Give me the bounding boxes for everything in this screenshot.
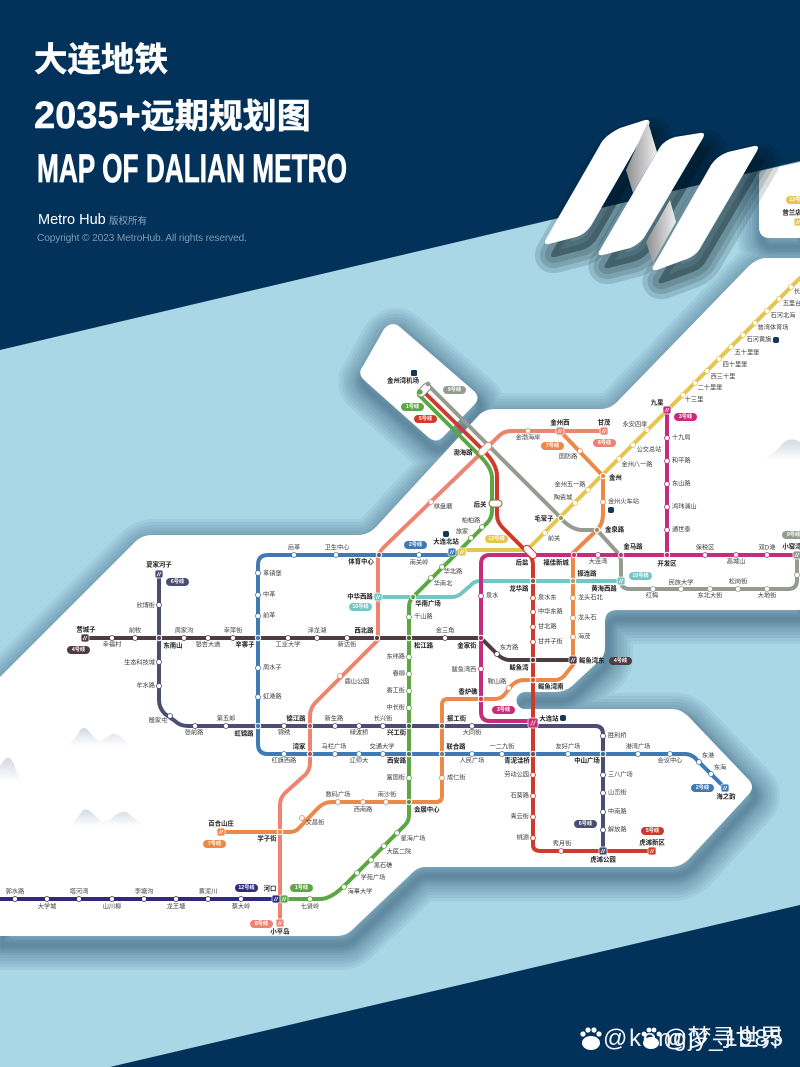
station labels south: 郭水路 [6,888,25,896]
line badges: 8号线 [255,919,269,927]
station labels south: 鲅鱼湾东 [579,656,605,664]
station labels south: 河口 [264,884,276,892]
station labels west: 周家沟 [175,626,193,634]
station labels north: 华南北 [434,580,453,588]
station labels north: 大连湾 [589,558,607,566]
line 2 [258,555,725,788]
station labels north: 渤海路 [453,448,473,456]
station labels north: 十九局 [672,434,691,442]
title block [34,42,347,244]
paw icon 1 [580,1027,602,1050]
station labels west: 周水子 [263,664,282,672]
line 10 [378,581,621,597]
station labels north: 旅家 [456,528,468,536]
station labels south: 学苑广场 [361,874,385,882]
stations line 13 [542,284,794,536]
line badges: 5号线 [419,414,433,422]
station labels south: 虎滩公园 [590,854,616,864]
station labels west: 张前路 [185,728,204,736]
station labels north: 东山路 [672,480,691,488]
line badges: 12号线 [238,883,255,891]
station labels west: 前革 [263,612,275,620]
station labels west: 幸萍街 [224,626,242,634]
line 13 [462,278,800,550]
line 12 [0,897,276,901]
copyright: Copyright © 2023 MetroHub. All rights reserved. [37,233,247,244]
station labels west: 欣博街 [136,602,155,610]
station labels west: 马栏广场 [322,742,346,750]
station labels west: 银杏大道 [196,640,220,648]
station labels north: 后盐 [516,558,529,566]
station labels north: 金州 [609,472,622,482]
station labels south: 会展中心 [414,804,440,814]
station labels west: 卫生中心 [325,544,349,552]
decorative mountains [0,439,800,826]
station labels south: 龙王塘 [167,902,185,910]
station labels south: 金三角 [436,626,454,634]
station labels north: 东北大街 [698,592,722,600]
station labels west: 泽龙湖 [308,626,326,634]
logo fold 2 [646,200,676,263]
station labels south: 东海 [714,764,726,772]
station labels north: 大地街 [758,592,776,600]
station labels west: 红旗西路 [272,756,297,764]
station labels south: 东港 [702,752,715,760]
station labels north: 金州火车站 [608,498,639,506]
logo ribbon 3 [653,146,758,270]
line badges: 9号线 [787,530,800,538]
line badges: 4号线 [614,656,628,664]
station labels south: 香炉礁 [458,686,478,696]
station labels north: 西三十里 [711,372,735,380]
logo fold 1 [626,122,657,193]
station labels north: 金州湾机场 [387,376,420,384]
station labels south: 会议中心 [658,756,682,764]
station labels south: 鲅鱼湾西 [452,666,476,674]
line badges: 5号线 [646,826,660,834]
station labels north: 前关 [548,534,560,542]
line badges: 6号线 [579,819,593,827]
line 3 [481,410,797,721]
station labels north: 开发区 [657,558,677,568]
station labels west: 湾家 [293,742,306,750]
station labels west: 中华西路 [347,592,373,600]
station labels north: 毛莹子 [534,514,554,522]
station labels north: 鸿玮澜山 [672,502,697,510]
station labels south: 秀月街 [553,840,571,848]
station labels south: 海事大学 [348,888,372,896]
station labels west: 牟水路 [136,682,156,690]
line badges: 8号线 [598,438,612,446]
line badges: 7号线 [546,441,560,449]
stations line 4 [110,636,500,656]
station labels north: 后关 [474,500,487,508]
station labels south: 山川柳 [103,902,121,910]
station labels south: 友好广场 [556,742,580,750]
station labels west: 生态科技城 [124,658,155,666]
station labels west: 中革 [263,590,275,598]
station labels south: 人民广场 [460,756,484,764]
station labels north: 四十里堡 [723,360,747,368]
station labels north: 南关岭 [410,558,428,566]
logo ribbon 2 [599,133,704,255]
station labels west: 东南山 [163,640,183,650]
station labels north: 石河北海 [771,312,795,320]
station labels south: 金家街 [457,640,477,650]
watermark [580,1025,783,1052]
watermark text 1: @kongjy_1985 [603,1025,783,1052]
station labels north: 振连路 [577,568,597,578]
station labels west: 虹锦路 [234,728,254,738]
station labels north: 金渤海岸 [516,434,540,442]
route lines [0,278,800,923]
line 6 [159,574,603,851]
station labels south: 中南路 [608,808,627,816]
station labels south: 解放路 [608,826,627,834]
station labels west: 体育中心 [348,556,374,566]
station labels north: 永安四季 [623,420,647,428]
station labels north: 华北路 [444,568,463,576]
line badges: 2号线 [409,540,423,548]
station labels north: 和平路 [672,456,691,464]
station labels west: 新达街 [338,640,356,648]
station labels south: 成仁街 [447,774,466,782]
station labels north: 金泉路 [605,524,625,534]
station labels north: 龙头石 [578,614,597,622]
station labels north: 二十里堡 [698,384,722,392]
line badges: 10号线 [632,571,649,579]
line badges: 6号线 [171,577,185,585]
station labels west: 锦江路 [286,714,306,722]
line badges [67,195,800,928]
stations line 9 [650,572,800,592]
station labels south: 虎滩新区 [639,838,665,846]
line badges: 7号线 [208,839,222,847]
paw icon 2 [642,1028,661,1049]
station labels west: 西北路 [354,626,374,634]
station labels north: 棋盘磨 [434,502,452,510]
station labels north: 金马路 [623,542,643,550]
station labels north: 甘井子街 [538,638,563,646]
station labels south: 蔡大岭 [232,902,250,910]
station labels west: 新生路 [325,714,344,722]
stations line 1 [308,524,484,902]
station labels north: 中华东路 [538,608,564,616]
station labels west [76,544,407,814]
station labels north: 普湾体育场 [758,324,788,332]
station labels west: 革镇堡 [263,570,282,578]
station labels west: 鹿山公园 [345,678,369,686]
station labels west: 交通大学 [370,742,394,750]
station labels north: 高城山 [727,558,745,566]
station labels south: 桃源 [517,834,529,842]
station labels north: 十三里 [685,396,703,404]
line badges: 3号线 [679,412,693,420]
watermark text 2: @梦寻世界 [663,1025,783,1052]
station labels south: 一二九街 [490,742,514,750]
line 8 [280,431,603,923]
station labels south: 青泥洼桥 [504,756,530,764]
station labels west: 西南路 [354,806,373,814]
station labels north: 大连北站 [433,536,459,546]
terminal stations [81,218,800,927]
station labels south: 鲅鱼湾南 [538,682,564,690]
land masses [0,162,800,936]
station labels north: 金州西 [550,418,570,426]
station labels north: 民族大学 [669,578,693,586]
station labels west: 辽师大 [350,756,368,764]
station labels west: 数码广场 [326,790,350,798]
station labels west: 南沙街 [378,790,396,798]
station labels south: 胜利桥 [608,732,627,740]
station labels north: 陶瓷城 [554,494,572,502]
station labels south: 文昌街 [306,818,324,826]
station labels north: 甘茂 [598,418,611,426]
station labels north [387,208,800,646]
station labels north: 龙华路 [509,584,529,592]
station labels west: 锦绣 [278,728,291,736]
station labels south: 大学城 [38,902,56,910]
line badges: 10号线 [352,602,369,610]
station labels north: 华南广场 [415,598,441,608]
station labels north: 国防路 [559,452,578,460]
station labels south: 大同街 [463,728,481,736]
station labels south: 七贤岭 [301,902,319,910]
facility icons [411,337,779,721]
station labels west: 辛寨子 [235,640,255,648]
station labels south: 大连站 [539,714,559,722]
station labels north: 千山路 [414,612,433,620]
station labels west: 后革 [288,544,300,552]
station labels south: 大医二院 [387,848,411,856]
station labels west: 西安路 [387,756,407,764]
station labels north: 金州八一路 [622,460,653,468]
logo ribbon 1 [545,120,650,244]
line 1 [284,395,492,899]
line badges: 3号线 [497,705,511,713]
station labels north: 松岗街 [729,578,747,586]
station labels south: 星海广场 [401,834,425,842]
station labels south: 东方路 [500,644,519,652]
station labels south [6,626,736,936]
station labels west: 虹港路 [263,692,282,700]
line 5 [422,390,652,851]
stations line 3 [478,436,770,672]
interchange stations [156,473,670,835]
station labels west: 殷家屯 [149,716,167,724]
station labels south: 振工街 [447,714,467,722]
station labels west: 春柳 [393,670,405,678]
station labels west: 前牧 [129,626,142,634]
station labels west: 富国街 [386,774,405,782]
logo shadows [551,133,764,283]
station labels west: 长兴街 [374,714,392,722]
copyright owner: 版权所有 [109,215,147,227]
station labels west: 香工街 [386,686,405,694]
station labels south: 黑石礁 [374,862,393,870]
stations line 5 [530,596,564,854]
line badges: 1号线 [295,883,309,891]
station labels north: 红梅 [646,592,658,600]
station labels south: 联合路 [446,742,466,750]
station labels south: 黄泥川 [199,888,217,896]
station labels south: 港湾广场 [626,742,650,750]
station labels north: 黄海西路 [591,584,617,592]
station labels south: 三八广场 [608,770,633,778]
station labels south: 海之韵 [716,792,736,800]
brand: Metro Hub [38,212,106,228]
english title: MAP OF DALIAN METRO [37,147,347,191]
stations line 12 [12,896,244,902]
station labels south: 塔河湾 [70,888,88,896]
station labels south: 山峦街 [608,788,627,796]
station labels south: 松江路 [414,640,434,650]
station labels west: 中长街 [386,704,405,712]
station labels west: 幸福村 [103,640,121,648]
station labels north: 龙头石北 [578,594,604,602]
title line 2: 2035+远期规划图 [34,95,311,137]
station labels north: 公交总站 [637,446,661,454]
station labels west: 夏家河子 [146,560,172,568]
station labels west: 绿波桥 [350,728,368,736]
station labels north: 福佳新城 [543,558,569,566]
station labels south: 中山广场 [574,756,600,764]
line 9 [428,385,797,589]
station labels west: 第五郎 [217,714,235,722]
station labels north: 通世泰 [672,526,691,534]
station labels north: 甘北路 [538,622,557,630]
station labels south: 青云街 [510,812,529,820]
stations line 2 [256,552,714,776]
line badges: 4号线 [72,645,86,653]
station labels north: 双D港 [759,544,776,552]
station labels west: 工业大学 [276,640,300,648]
station labels north: 泉水 [486,592,499,600]
station labels south: 学子街 [257,834,277,842]
logo mark [545,120,764,283]
station labels north: 长 [794,288,800,296]
station labels west: 营城子 [76,624,96,634]
station labels north: 泉水东 [538,594,557,602]
station labels south: 李塘沟 [135,888,153,896]
station labels south: 鲅鱼湾 [509,662,529,672]
line badges: 9号线 [448,385,462,393]
title line 1: 大连地铁 [34,42,168,79]
station labels south: 石葵路 [510,792,530,800]
station labels west: 兴工街 [387,728,407,736]
station labels north: 保税区 [696,544,714,552]
station labels north: 海茂 [578,632,590,640]
line 4 [85,638,573,660]
station labels south: 劳动公园 [504,770,529,778]
station labels north: 金州五一路 [555,480,586,488]
station labels south: 鞍山路 [488,678,507,686]
line badges: 1号线 [406,402,420,410]
stations line 6 [156,602,606,832]
stations line 8 and 7 [300,428,606,820]
station labels north: 九里 [651,398,664,406]
station labels west: 东纬路 [386,652,406,660]
line badges: 13号线 [488,534,505,542]
station labels north: 柏柏路 [462,516,481,524]
line 7 [221,431,603,832]
station labels north: 石河黄旗 [747,336,771,344]
station labels north: 五十里堡 [735,348,759,356]
station labels south: 小平岛 [270,926,290,936]
line badges: 2号线 [696,783,710,791]
station labels south: 百合山庄 [208,818,234,828]
land shadow [3,171,800,945]
